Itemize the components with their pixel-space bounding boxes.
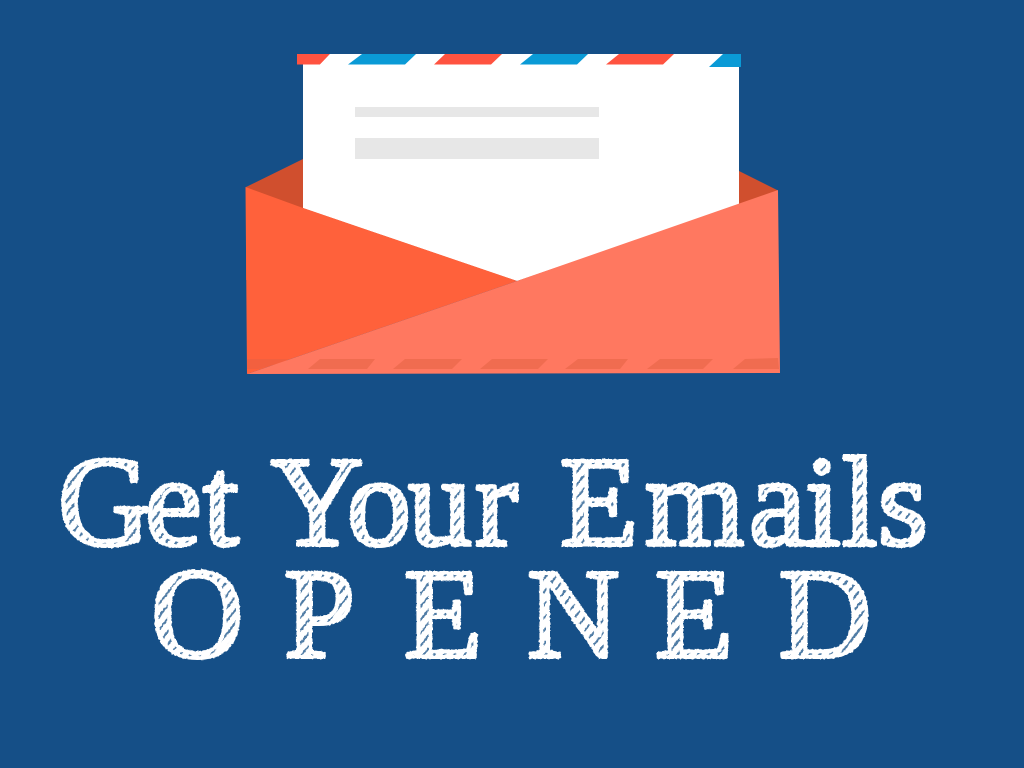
letter text line 2 — [355, 138, 599, 159]
title line 2: OPENED — [151, 543, 871, 685]
envelope left front panel — [246, 187, 517, 374]
title line 1: Get Your Emails — [58, 431, 928, 573]
envelope left bottom band — [247, 359, 288, 369]
airmail stripe — [297, 54, 741, 67]
envelope right front panel — [247, 190, 780, 374]
title — [58, 431, 928, 685]
envelope bottom stitching — [308, 358, 779, 369]
envelope back flap — [246, 159, 777, 280]
letter text line 1 — [355, 107, 599, 117]
illustration: open envelope — [246, 54, 780, 374]
letter sheet — [297, 54, 741, 281]
